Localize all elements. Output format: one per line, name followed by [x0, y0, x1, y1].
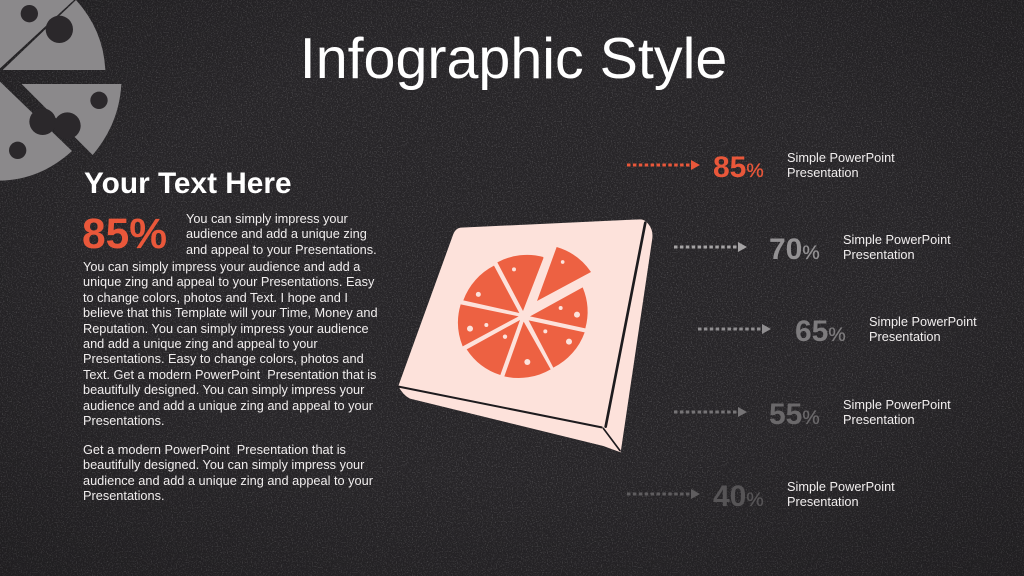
row: 65% — [698, 314, 977, 348]
body paragraph — [83, 259, 378, 428]
row: 70% — [674, 232, 951, 266]
label: Presentation — [787, 494, 859, 509]
title: Infographic Style — [300, 27, 727, 91]
closing paragraph: audience and add a unique zing and appeal to your — [83, 473, 373, 488]
body paragraph: believe that this Template will your Time, Money and — [83, 305, 378, 320]
icon: corner pizza slices — [0, 0, 122, 181]
pizza box illustration — [398, 219, 652, 452]
upper slice — [0, 0, 105, 70]
arrow — [674, 407, 747, 417]
value: 85% — [713, 151, 764, 184]
closing paragraph: Get a modern PowerPoint Presentation that is — [83, 442, 346, 457]
arrow — [674, 242, 747, 252]
intro text — [186, 211, 377, 257]
value: 70% — [769, 233, 820, 266]
label — [787, 479, 895, 509]
lower slice — [0, 82, 121, 181]
body paragraph: Reputation. You can simply impress your audience — [83, 321, 369, 336]
arrow — [627, 160, 700, 170]
body paragraph: Text. Get a modern PowerPoint Presentation that is — [83, 367, 376, 382]
row: 85% — [627, 150, 895, 184]
row: 55% — [674, 397, 951, 431]
body paragraph: unique zing and appeal to your Presentations. Easy — [83, 274, 374, 289]
label — [843, 232, 951, 262]
row: 40% — [627, 479, 895, 513]
label: Presentation — [787, 165, 859, 180]
intro text: You can simply impress your — [186, 211, 348, 226]
body paragraph: audience and add a unique zing and appeal to your — [83, 398, 373, 413]
closing paragraph — [83, 442, 373, 503]
intro text: audience and add a unique zing — [186, 226, 367, 241]
closing paragraph: Presentations. — [83, 488, 165, 503]
body paragraph: and add a unique zing and appeal to your — [83, 336, 318, 351]
pizza toppings — [467, 260, 580, 365]
heading: Your Text Here — [84, 167, 292, 200]
label: Simple PowerPoint — [843, 397, 951, 412]
closing paragraph: beautifully designed. You can simply impress your — [83, 457, 364, 472]
label: Presentation — [869, 329, 941, 344]
value: 65% — [795, 315, 846, 348]
label: Simple PowerPoint — [787, 479, 895, 494]
body paragraph: beautifully designed. You can simply impress your — [83, 382, 364, 397]
label — [869, 314, 977, 344]
label: Simple PowerPoint — [869, 314, 977, 329]
arrow — [698, 324, 771, 334]
pizza — [458, 247, 591, 378]
label: Simple PowerPoint — [843, 232, 951, 247]
value: 40% — [713, 480, 764, 513]
body paragraph: Presentations. — [83, 413, 165, 428]
body paragraph: Presentations. Easy to change colors, photos and — [83, 351, 364, 366]
label — [787, 150, 895, 180]
body paragraph: You can simply impress your audience and add a — [83, 259, 360, 274]
big percentage: 85% — [82, 211, 167, 258]
value: 55% — [769, 398, 820, 431]
intro text: and appeal to your Presentations. — [186, 242, 377, 257]
label: Presentation — [843, 412, 915, 427]
box body — [398, 219, 652, 452]
label: Presentation — [843, 247, 915, 262]
arrow — [627, 489, 700, 499]
label — [843, 397, 951, 427]
label: Simple PowerPoint — [787, 150, 895, 165]
body paragraph: to change colors, photos and Text. I hope and I — [83, 290, 348, 305]
box edge lines — [399, 223, 645, 451]
